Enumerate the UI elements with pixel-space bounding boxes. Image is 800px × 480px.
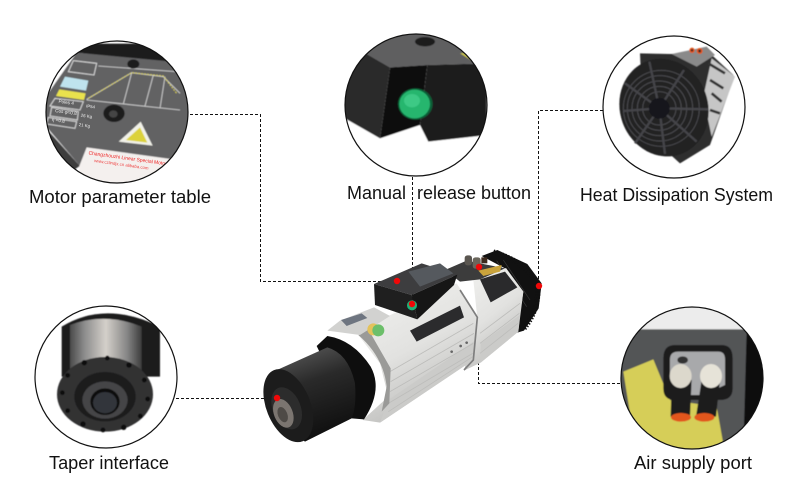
detail photo: taper face bbox=[57, 313, 160, 432]
dashed leader: motor parameter table bbox=[190, 114, 397, 282]
circle outline bbox=[345, 34, 487, 176]
small screws bbox=[450, 341, 468, 353]
housing rib lines bbox=[388, 303, 520, 412]
nameplate sticker bbox=[341, 313, 367, 326]
label: Taper interface bbox=[49, 453, 169, 473]
panel: heat dissipation system bbox=[580, 36, 773, 205]
top face of housing bbox=[327, 307, 390, 335]
dashed leader: air supply port bbox=[478, 267, 621, 384]
detail photo: parameter plate bbox=[46, 42, 188, 182]
dashed leader: taper interface bbox=[176, 398, 277, 400]
green release button bbox=[407, 300, 417, 310]
main aluminium housing bbox=[358, 283, 479, 423]
dashed leader: manual release button bbox=[412, 177, 414, 304]
circle outline bbox=[603, 36, 745, 178]
plate text: Changzhouzhi Linear Special Motor Factory bbox=[88, 150, 185, 170]
metal joint between housings bbox=[460, 290, 477, 370]
plate text: Poles 4 bbox=[58, 99, 75, 106]
plate text: 26 Kg bbox=[81, 113, 93, 119]
taper chuck bbox=[265, 383, 308, 434]
front face bbox=[254, 362, 323, 449]
air fittings on top bbox=[445, 255, 505, 282]
detail photo: fan cover bbox=[618, 46, 736, 164]
collar ring bbox=[317, 336, 376, 419]
spindle motor illustration bbox=[254, 250, 542, 449]
rear aluminium housing bbox=[464, 268, 523, 371]
cooling slots behind collar bbox=[358, 329, 391, 412]
circle outline bbox=[621, 307, 763, 449]
heat sink fins bbox=[482, 250, 542, 333]
yellow and green stickers bbox=[367, 323, 384, 336]
dashed leader: heat dissipation system bbox=[538, 110, 603, 286]
label: Heat Dissipation System bbox=[580, 185, 773, 205]
plate text bbox=[52, 100, 166, 170]
black slot plate bbox=[410, 306, 464, 342]
plate text: www.czlindjx.cn alibaba.com bbox=[94, 158, 149, 171]
front black cylinder bbox=[273, 347, 355, 442]
circle outline bbox=[46, 41, 188, 183]
panel: motor parameter table bbox=[29, 37, 211, 207]
panel: air supply port bbox=[617, 300, 767, 473]
detail photo: green button bbox=[346, 34, 486, 142]
label: Manual: Manual bbox=[347, 183, 406, 203]
black electrical box bbox=[374, 263, 457, 319]
label: Motor parameter table bbox=[29, 187, 211, 207]
label: release button: release button bbox=[417, 183, 531, 203]
plate text: η =0.8 bbox=[52, 117, 66, 124]
rear black cover plate bbox=[480, 272, 517, 302]
lower shaded facets bbox=[380, 315, 520, 423]
label: Air supply port bbox=[634, 453, 752, 473]
detail photo: air fittings bbox=[622, 308, 762, 448]
panel: manual release button bbox=[340, 30, 531, 203]
plate text: Cos φ=0.8 bbox=[55, 108, 78, 116]
plate text: 21 Kg bbox=[79, 122, 91, 129]
panel: taper interface bbox=[35, 306, 177, 473]
plate text: IP54 bbox=[86, 103, 96, 110]
circle outline bbox=[35, 306, 177, 448]
red marker dots bbox=[274, 264, 542, 401]
